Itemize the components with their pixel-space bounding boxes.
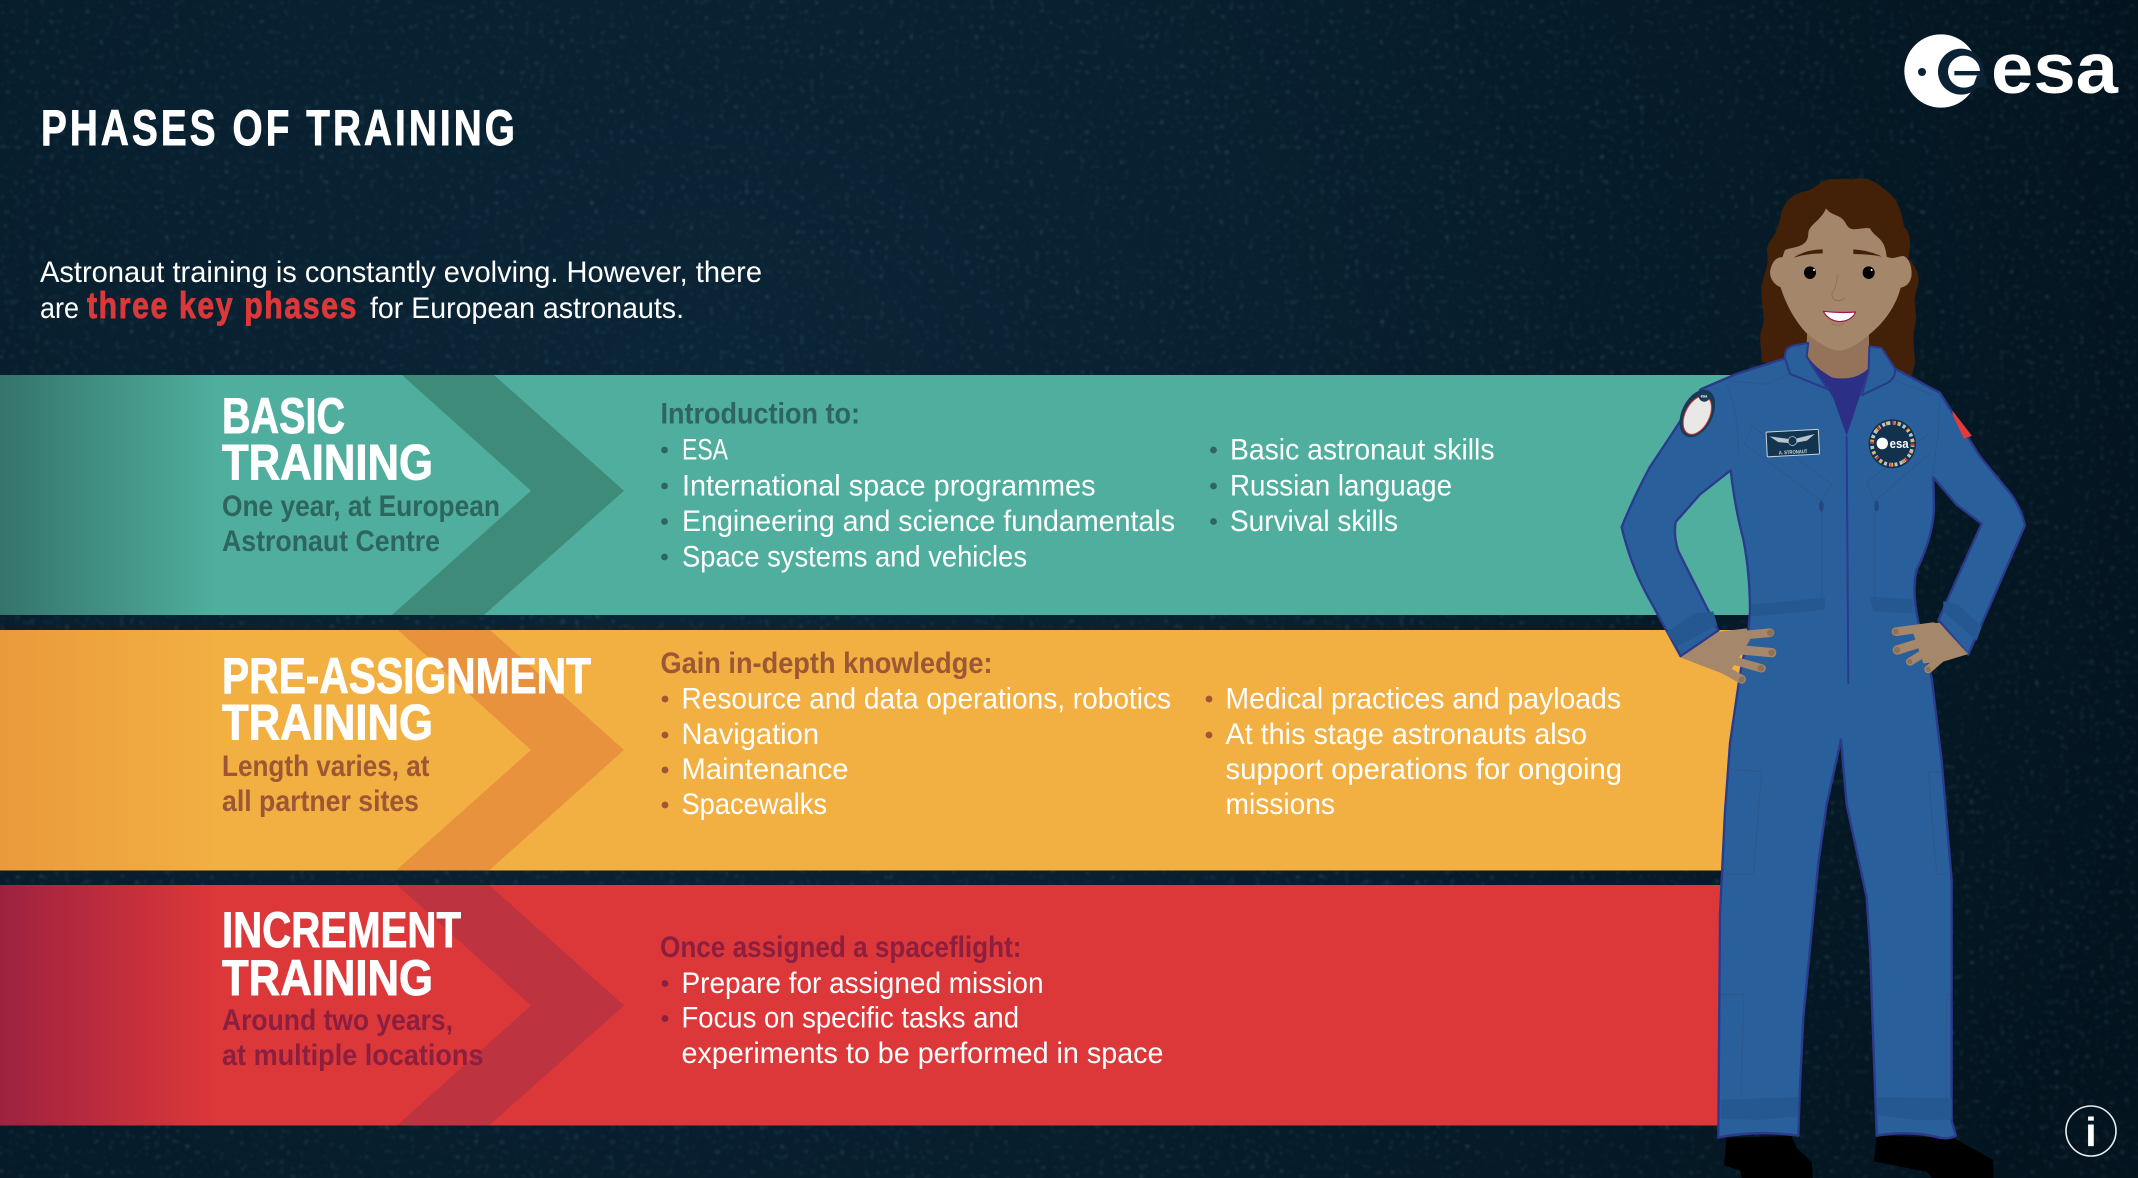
list: increment topics: experiments to be performed in space (682, 1037, 1164, 1070)
boots (1724, 1136, 1993, 1178)
icon: information (2066, 1106, 2116, 1156)
badge: esa flags (1869, 419, 1916, 468)
list: basic training topics: Basic astronaut skills (1230, 434, 1494, 466)
list: basic training topics: ESA (682, 434, 728, 466)
heading: pre-assignment training: PRE-ASSIGNMENT (222, 648, 591, 704)
name tag (1766, 429, 1820, 457)
title: PHASES OF TRAINING (41, 100, 518, 156)
list: pre-assignment topics: support operations for ongoing (1226, 753, 1622, 786)
duration: pre-assignment training (222, 750, 430, 818)
intro text: three key phases (87, 285, 358, 326)
collar (1785, 343, 1895, 395)
heading: basic training: TRAINING (222, 434, 433, 490)
duration: increment training: Around two years, (222, 1004, 453, 1037)
patch: shoulder (1672, 384, 1722, 443)
heading: pre-assignment training (222, 648, 591, 750)
list: increment topics: Focus on specific tasks and (682, 1002, 1019, 1034)
list: pre-assignment topics: At this stage astronauts also (1226, 718, 1587, 751)
list: pre-assignment topics: Gain in-depth knowledge: (660, 647, 992, 680)
illustration: astronaut (1622, 178, 2025, 1178)
neck (1806, 327, 1869, 378)
heading: increment training (222, 902, 461, 1006)
duration: pre-assignment training: Length varies, at (222, 750, 430, 783)
heading: pre-assignment training: TRAINING (222, 694, 433, 750)
heading: increment training: TRAINING (222, 950, 433, 1006)
intro text: are (40, 292, 79, 325)
hands (1681, 623, 1968, 682)
badge: esa flags: esa (1890, 436, 1909, 451)
list: basic training topics: Russian language (1230, 470, 1452, 502)
hair (1760, 178, 1919, 377)
list: increment topics (660, 931, 1164, 1070)
list: pre-assignment topics: Spacewalks (682, 788, 827, 821)
heading: basic training: BASIC (222, 388, 345, 444)
duration: increment training: at multiple locations (222, 1039, 484, 1072)
intro text (40, 256, 762, 326)
flight suit (1622, 358, 2025, 1138)
list: pre-assignment topics: Maintenance (682, 753, 848, 786)
list: basic training topics: Engineering and science fundamentals (682, 505, 1175, 538)
patch: flag on sleeve (1953, 411, 1972, 439)
list: pre-assignment topics: Resource and data operations, robotics (682, 682, 1171, 716)
list: increment topics: Once assigned a spaceflight: (660, 931, 1022, 964)
undershirt (1810, 360, 1869, 436)
list: pre-assignment topics: missions (1226, 788, 1335, 821)
list: pre-assignment topics: Navigation (682, 718, 819, 751)
heading: basic training (222, 388, 433, 490)
duration: basic training (222, 490, 500, 558)
duration: basic training: One year, at European (222, 490, 500, 523)
name tag: A. STRONAUT (1779, 449, 1808, 457)
panel: increment training (0, 885, 1780, 1126)
panel: basic training (0, 375, 1780, 615)
list: basic training topics (660, 398, 1494, 574)
list: increment topics: Prepare for assigned mission (682, 967, 1044, 1000)
list: basic training topics: Introduction to: (660, 398, 860, 430)
duration: pre-assignment training: all partner sites (222, 785, 419, 818)
suit details (1667, 374, 1982, 1120)
list: basic training topics: Space systems and vehicles (682, 540, 1027, 574)
duration: increment training (222, 1004, 484, 1072)
list: pre-assignment topics: Medical practices and payloads (1226, 682, 1621, 716)
patch: shoulder: esa (1701, 393, 1708, 398)
intro text: Astronaut training is constantly evolving. However, there (40, 256, 762, 289)
logo: esa (1904, 30, 2119, 109)
duration: basic training: Astronaut Centre (222, 525, 440, 558)
panel: pre-assignment training (0, 630, 1780, 870)
heading: increment training: INCREMENT (222, 902, 461, 958)
list: pre-assignment topics (660, 647, 1622, 821)
logo: esa: esa (1991, 30, 2119, 109)
face (1770, 208, 1912, 351)
intro text: for European astronauts. (370, 292, 684, 325)
list: basic training topics: Survival skills (1230, 505, 1398, 538)
list: basic training topics: International space programmes (682, 470, 1096, 502)
icon: information: i (2085, 1109, 2097, 1155)
